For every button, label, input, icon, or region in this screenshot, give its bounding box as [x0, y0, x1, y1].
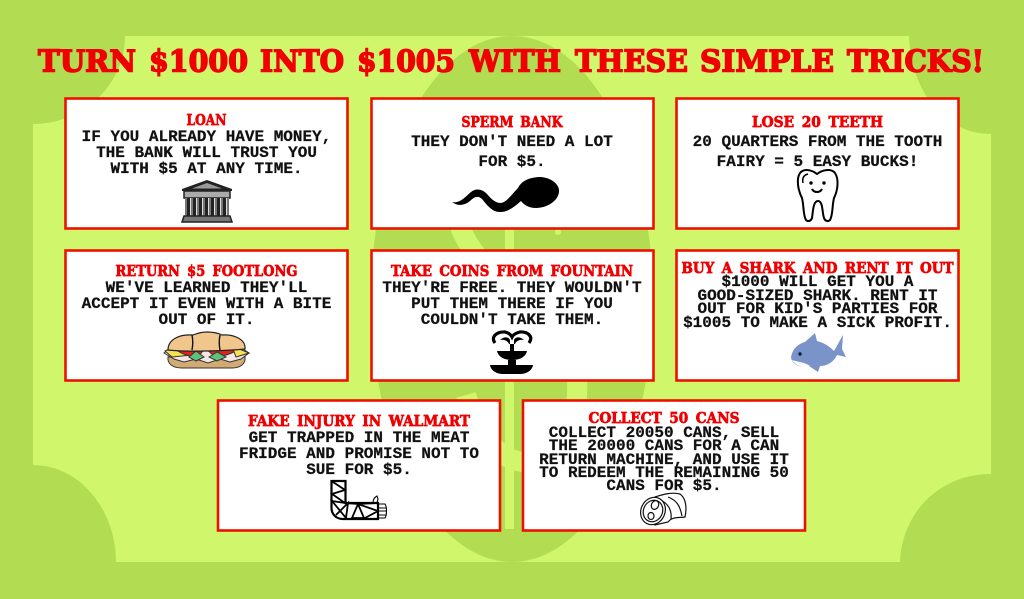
panel: buy a shark: [676, 250, 958, 380]
panel: lose 20 teeth: [676, 98, 958, 228]
text: shark description: [683, 273, 952, 332]
text: sperm bank description: [411, 133, 613, 171]
text: loan description: WITH $5 AT ANY TIME.: [110, 160, 303, 178]
text: shark description: GOOD-SIZED SHARK. RENT IT: [697, 287, 938, 305]
text: loan description: [82, 128, 331, 178]
heading: sperm bank: SPERM BANK: [462, 114, 564, 131]
icon: smiling tooth: [798, 170, 838, 221]
text: shark description: $1005 TO MAKE A SICK PROFIT.: [683, 314, 952, 332]
text: cans description: CANS FOR $5.: [606, 477, 722, 495]
icon: bank: [182, 180, 232, 222]
text: footlong description: OUT OF IT.: [158, 311, 255, 329]
text: injury description: [239, 429, 479, 479]
title: SIMPLE: [700, 44, 834, 80]
icon: fountain: [490, 332, 533, 374]
icon: shark: [791, 333, 846, 372]
panel: take coins from fountain: [372, 250, 654, 380]
text: cans description: [539, 424, 789, 495]
title: WITH: [468, 44, 561, 80]
text: teeth description: [693, 133, 942, 171]
text: cans description: TO REDEEM THE REMAINING 50: [539, 464, 789, 482]
title: THESE: [575, 44, 688, 80]
heading: loan: LOAN: [186, 112, 226, 129]
heading: return footlong: RETURN $5 FOOTLONG: [116, 263, 298, 280]
text: teeth description: FAIRY = 5 EASY BUCKS!: [717, 153, 918, 171]
text: injury description: SUE FOR $5.: [306, 461, 412, 479]
text: fountain description: [382, 279, 642, 329]
text: footlong description: WE'VE LEARNED THEY'LL: [106, 279, 307, 297]
title: TRICKS!: [847, 44, 984, 80]
heading: take coins: TAKE COINS FROM FOUNTAIN: [391, 263, 633, 280]
icon: arm cast: [332, 481, 387, 519]
heading: lose 20 teeth: LOSE 20 TEETH: [752, 114, 883, 131]
panel: sperm bank: [372, 98, 654, 228]
panel: fake injury in walmart: [218, 400, 500, 530]
text: shark description: OUT FOR KID'S PARTIES FOR: [697, 300, 938, 318]
text: teeth description: 20 QUARTERS FROM THE TOOTH: [693, 133, 942, 151]
text: fountain description: PUT THEM THERE IF YOU: [411, 295, 613, 313]
title: INTO: [260, 44, 344, 80]
text: footlong description: ACCEPT IT EVEN WITH A BITE: [82, 295, 331, 313]
icon: crushed can: [636, 493, 686, 529]
title: $1000: [149, 44, 248, 80]
text: fountain description: THEY'RE FREE. THEY WOULDN'T: [382, 279, 642, 297]
title: [38, 44, 984, 80]
text: injury description: GET TRAPPED IN THE MEAT: [249, 429, 470, 447]
icon: sandwich: [164, 332, 249, 368]
text: loan description: THE BANK WILL TRUST YOU: [96, 144, 317, 162]
panel: return $5 footlong: [66, 250, 348, 380]
icon: sperm: [452, 177, 559, 212]
title: TURN: [38, 44, 136, 80]
text: sperm bank description: THEY DON'T NEED A LOT: [411, 133, 613, 151]
heading: buy a shark: BUY A SHARK AND RENT IT OUT: [682, 260, 954, 277]
text: shark description: $1000 WILL GET YOU A: [721, 273, 914, 291]
text: sperm bank description: FOR $5.: [478, 153, 546, 171]
title: $1005: [357, 44, 455, 80]
panel: loan: [66, 98, 348, 228]
panel: collect 50 cans: [523, 400, 805, 530]
heading: fake injury: FAKE INJURY IN WALMART: [248, 413, 470, 430]
text: cans description: THE 20000 CANS FOR A CAN: [549, 437, 779, 455]
text: injury description: FRIDGE AND PROMISE NOT TO: [239, 445, 479, 463]
text: fountain description: COULDN'T TAKE THEM.: [421, 311, 603, 329]
text: loan description: IF YOU ALREADY HAVE MONEY,: [82, 128, 331, 146]
text: cans description: COLLECT 20050 CANS, SELL: [549, 424, 779, 442]
text: cans description: RETURN MACHINE, AND USE IT: [539, 451, 789, 469]
heading: collect cans: COLLECT 50 CANS: [588, 410, 740, 427]
text: footlong description: [82, 279, 331, 329]
